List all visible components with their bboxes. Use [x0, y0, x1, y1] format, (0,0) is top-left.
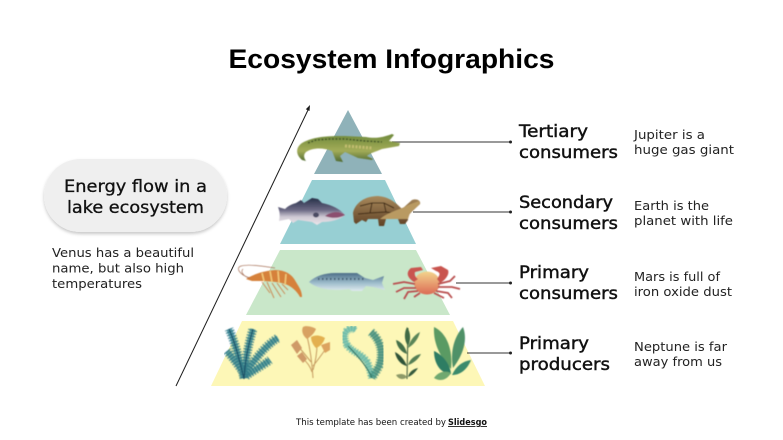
description: Mars — [634, 269, 732, 299]
icon: shrimp — [238, 265, 302, 298]
pyramid tier: tertiary consumers — [314, 110, 382, 174]
label: primary producers — [519, 334, 610, 375]
label: primary consumers: consumers — [519, 284, 618, 304]
label: primary producers: producers — [519, 355, 610, 375]
icon: golden seaweed — [291, 326, 330, 378]
icon: dark leafy plant — [395, 327, 421, 379]
description: Mars: iron oxide dust — [634, 284, 732, 299]
description: Jupiter — [633, 127, 734, 157]
label: tertiary consumers: consumers — [519, 143, 618, 163]
description: Mars: Mars is full of — [634, 269, 721, 284]
arrow: energy flow direction — [176, 105, 310, 386]
pill heading — [64, 177, 207, 217]
icon: crocodile — [297, 134, 400, 162]
text block: Venus description: temperatures — [52, 276, 142, 291]
description: Earth: planet with life — [634, 213, 733, 228]
pill background — [44, 159, 227, 232]
label: primary consumers: Primary — [519, 263, 589, 283]
text block: Venus description: name, but also high — [52, 260, 184, 276]
panel: energy flow pill — [44, 159, 227, 232]
pyramid tier: primary consumers — [246, 250, 450, 315]
description: Earth — [634, 198, 733, 228]
description: Jupiter: huge gas giant — [634, 142, 734, 157]
footer credit: This template has been created by — [295, 418, 446, 428]
connector: tertiary — [392, 140, 512, 144]
text block: Venus description — [52, 245, 194, 291]
label: primary consumers — [519, 263, 618, 304]
label: tertiary consumers: Tertiary — [518, 122, 588, 142]
text block: Venus description: Venus has a beautiful — [52, 245, 194, 260]
label: secondary consumers — [519, 193, 618, 234]
footer credit: Slidesgo — [448, 418, 487, 428]
label: secondary consumers: Secondary — [519, 193, 613, 213]
pyramid tier: primary producers — [211, 321, 485, 386]
pill heading: Energy flow in a — [64, 177, 207, 196]
description: Earth: Earth is the — [634, 198, 709, 213]
description: Neptune: away from us — [634, 354, 722, 369]
icon: broad green leaves — [434, 327, 471, 380]
label: tertiary consumers — [518, 122, 618, 163]
title: Ecosystem Infographics — [228, 44, 554, 74]
connector: secondary — [413, 210, 512, 214]
connector: primary consumers — [456, 282, 512, 284]
description: Neptune — [634, 339, 728, 369]
icon: teal fern — [227, 329, 278, 379]
description: Neptune: Neptune is far — [634, 339, 728, 354]
pill heading: lake ecosystem — [67, 198, 204, 217]
icon: curly green seaweed — [345, 329, 381, 378]
icon: bass fish — [278, 198, 345, 225]
icon: trout fish — [309, 273, 385, 291]
connector: primary producers — [467, 352, 512, 354]
icon: turtle — [353, 196, 420, 226]
label: secondary consumers: consumers — [519, 214, 618, 234]
description: Jupiter: Jupiter is a — [633, 127, 705, 142]
label: primary producers: Primary — [519, 334, 589, 354]
icon: crab — [393, 266, 460, 299]
pyramid tier: secondary consumers — [280, 180, 416, 244]
